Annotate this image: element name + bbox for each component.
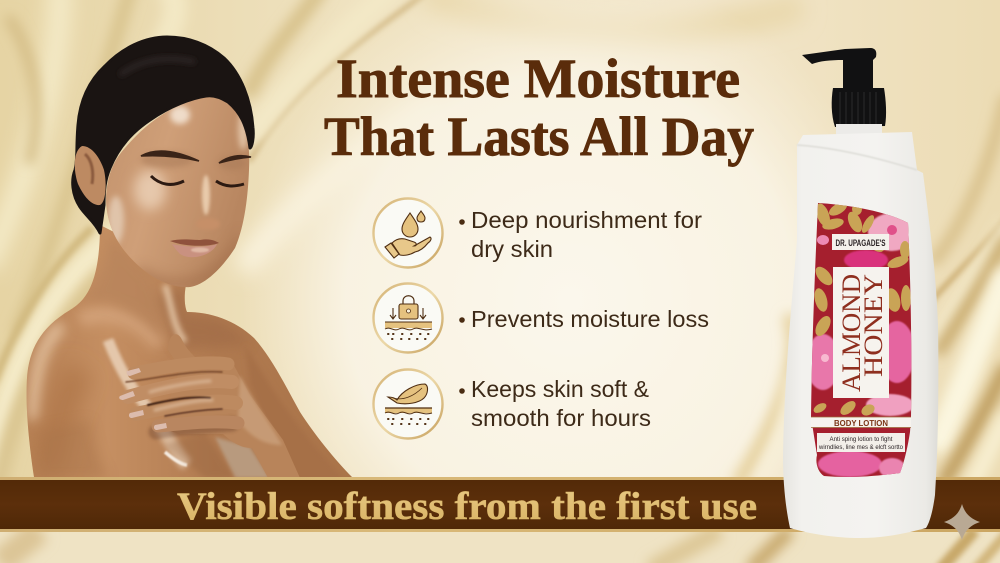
bullet text: smooth for hours bbox=[471, 405, 651, 431]
bullet text: Keeps skin soft & bbox=[471, 376, 649, 402]
title: That Lasts All Day bbox=[324, 106, 754, 167]
label: product name panel bbox=[833, 267, 889, 398]
eyebrows and closed eyes bbox=[141, 151, 251, 163]
sparkle icon bbox=[944, 504, 980, 540]
floral label bbox=[811, 203, 912, 477]
hair sheen bbox=[120, 59, 195, 75]
label: body lotion strip bbox=[811, 417, 911, 428]
bottle body bbox=[783, 132, 938, 538]
label: body lotion strip: BODY LOTION bbox=[834, 419, 888, 428]
ear bbox=[75, 146, 106, 205]
icon: padlock over skin layers bbox=[374, 284, 442, 352]
benefit 2: prevents moisture loss bbox=[374, 284, 709, 352]
pump dispenser bbox=[802, 48, 886, 127]
bullet text: dry skin bbox=[471, 236, 553, 262]
woman applying lotion to her shoulder bbox=[26, 36, 352, 477]
label: product name panel: ALMOND bbox=[837, 274, 866, 392]
benefit 1: deep nourishment bbox=[374, 198, 702, 268]
face bbox=[106, 96, 251, 290]
product: lotion bottle bbox=[783, 48, 938, 538]
body: shoulders and neck bbox=[26, 226, 352, 477]
ear inner shading bbox=[85, 154, 93, 184]
label: product name panel: HONEY bbox=[859, 274, 888, 377]
bullet text bbox=[459, 207, 702, 262]
title: Intense Moisture bbox=[336, 48, 740, 109]
bullet text: Deep nourishment for bbox=[471, 207, 702, 233]
label: description bbox=[817, 433, 905, 452]
benefit 3: soft and smooth bbox=[374, 370, 651, 438]
icon: water drops over hand bbox=[374, 198, 442, 268]
hand resting on the upper arm bbox=[119, 334, 300, 478]
bullet text bbox=[459, 376, 651, 431]
icon: feather over skin layers bbox=[374, 370, 442, 438]
banner tagline: Visible softness from the first use bbox=[177, 485, 757, 528]
label: brand tag bbox=[832, 234, 889, 250]
label: description: Anti sping lotion to fight bbox=[830, 436, 893, 443]
label: description: wirndlies, line mes & elcft sortto bbox=[818, 444, 903, 451]
title bbox=[324, 48, 754, 167]
bottle neck bbox=[836, 124, 882, 136]
bottom banner bbox=[0, 477, 1000, 532]
bullet text: Prevents moisture loss bbox=[471, 306, 709, 332]
label: brand tag: DR. UPAGADE'S bbox=[836, 238, 886, 249]
hair bbox=[73, 37, 253, 233]
